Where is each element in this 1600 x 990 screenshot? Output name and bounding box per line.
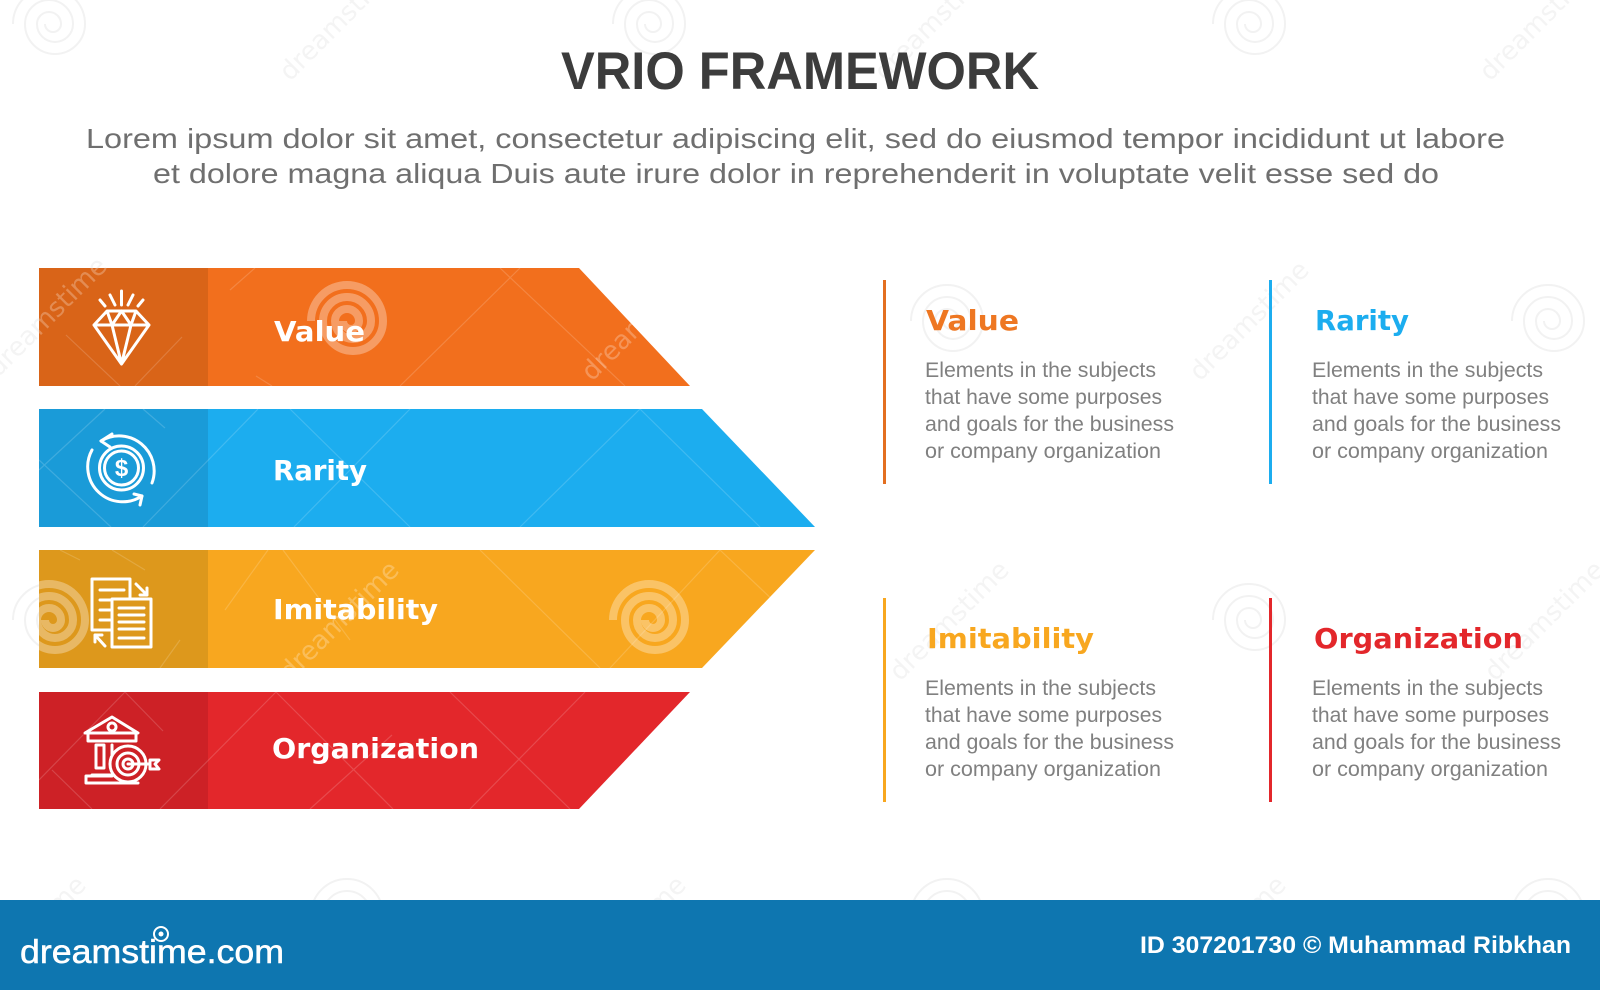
panel: arrow bars — [39, 268, 815, 809]
text: imitability description: or company organization — [925, 758, 1161, 781]
icon: coin cycle — [88, 434, 154, 505]
bar: rarity — [39, 409, 815, 527]
subtitle: et dolore magna aliqua Duis aute irure dolor in reprehenderit in voluptate velit esse sed do — [153, 158, 1439, 189]
panel: imitability description — [883, 598, 1174, 802]
text: rarity description: and goals for the business — [1312, 413, 1561, 436]
text: organization description: or company organization — [1312, 758, 1548, 781]
title: VRIO FRAMEWORK — [561, 42, 1039, 101]
icon: bank and target — [85, 717, 159, 783]
bar watermark overlay — [39, 268, 770, 809]
text: value description: and goals for the business — [925, 413, 1174, 436]
footer logo: dreamstime.com — [20, 933, 284, 970]
text: organization description — [1312, 677, 1561, 781]
icon: coin cycle: $ — [115, 455, 129, 482]
icon: diamond — [94, 291, 149, 364]
text: organization description: and goals for the business — [1312, 731, 1561, 754]
subtitle: Lorem ipsum dolor sit amet, consectetur adipiscing elit, sed do eiusmod tempor incididunt ut labore — [86, 123, 1505, 154]
text: rarity description: or company organization — [1312, 440, 1548, 463]
label: rarity: Rarity — [273, 454, 367, 487]
text: rarity description — [1312, 359, 1561, 463]
bar watermark overlay: dreamstime — [576, 255, 707, 387]
heading: organization: Organization — [1314, 622, 1523, 655]
text: organization description: Elements in the subjects — [1312, 677, 1543, 700]
footer bar — [0, 900, 1600, 990]
heading: value: Value — [926, 304, 1019, 337]
panel: value description — [883, 280, 1174, 484]
text: value description: that have some purposes — [925, 386, 1162, 409]
bar: imitability — [39, 550, 815, 668]
bar watermark overlay: dreamstime — [274, 555, 405, 687]
footer credit: ID 307201730 © Muhammad Ribkhan — [1140, 932, 1571, 959]
text: imitability description: Elements in the subjects — [925, 677, 1156, 700]
background watermark: dreamstime — [884, 555, 1015, 687]
subtitle — [86, 123, 1505, 189]
label: value: Value — [274, 315, 365, 348]
text: organization description: that have some purposes — [1312, 704, 1549, 727]
bar: organization — [39, 692, 690, 809]
text: rarity description: that have some purposes — [1312, 386, 1549, 409]
text: imitability description: and goals for the business — [925, 731, 1174, 754]
heading: rarity: Rarity — [1315, 304, 1409, 337]
label: organization: Organization — [272, 732, 479, 765]
text: rarity description: Elements in the subjects — [1312, 359, 1543, 382]
panel: organization description — [1269, 598, 1561, 802]
text: value description: or company organization — [925, 440, 1161, 463]
icon: documents — [92, 579, 151, 647]
text: imitability description — [925, 677, 1174, 781]
text: value description: Elements in the subjects — [925, 359, 1156, 382]
heading: imitability: Imitability — [927, 622, 1094, 655]
panel: rarity description — [1269, 280, 1561, 484]
label: imitability: Imitability — [273, 593, 438, 626]
text: value description — [925, 359, 1174, 463]
text: imitability description: that have some purposes — [925, 704, 1162, 727]
bar: value — [39, 268, 690, 386]
background watermark: dreamstime — [1184, 255, 1315, 387]
